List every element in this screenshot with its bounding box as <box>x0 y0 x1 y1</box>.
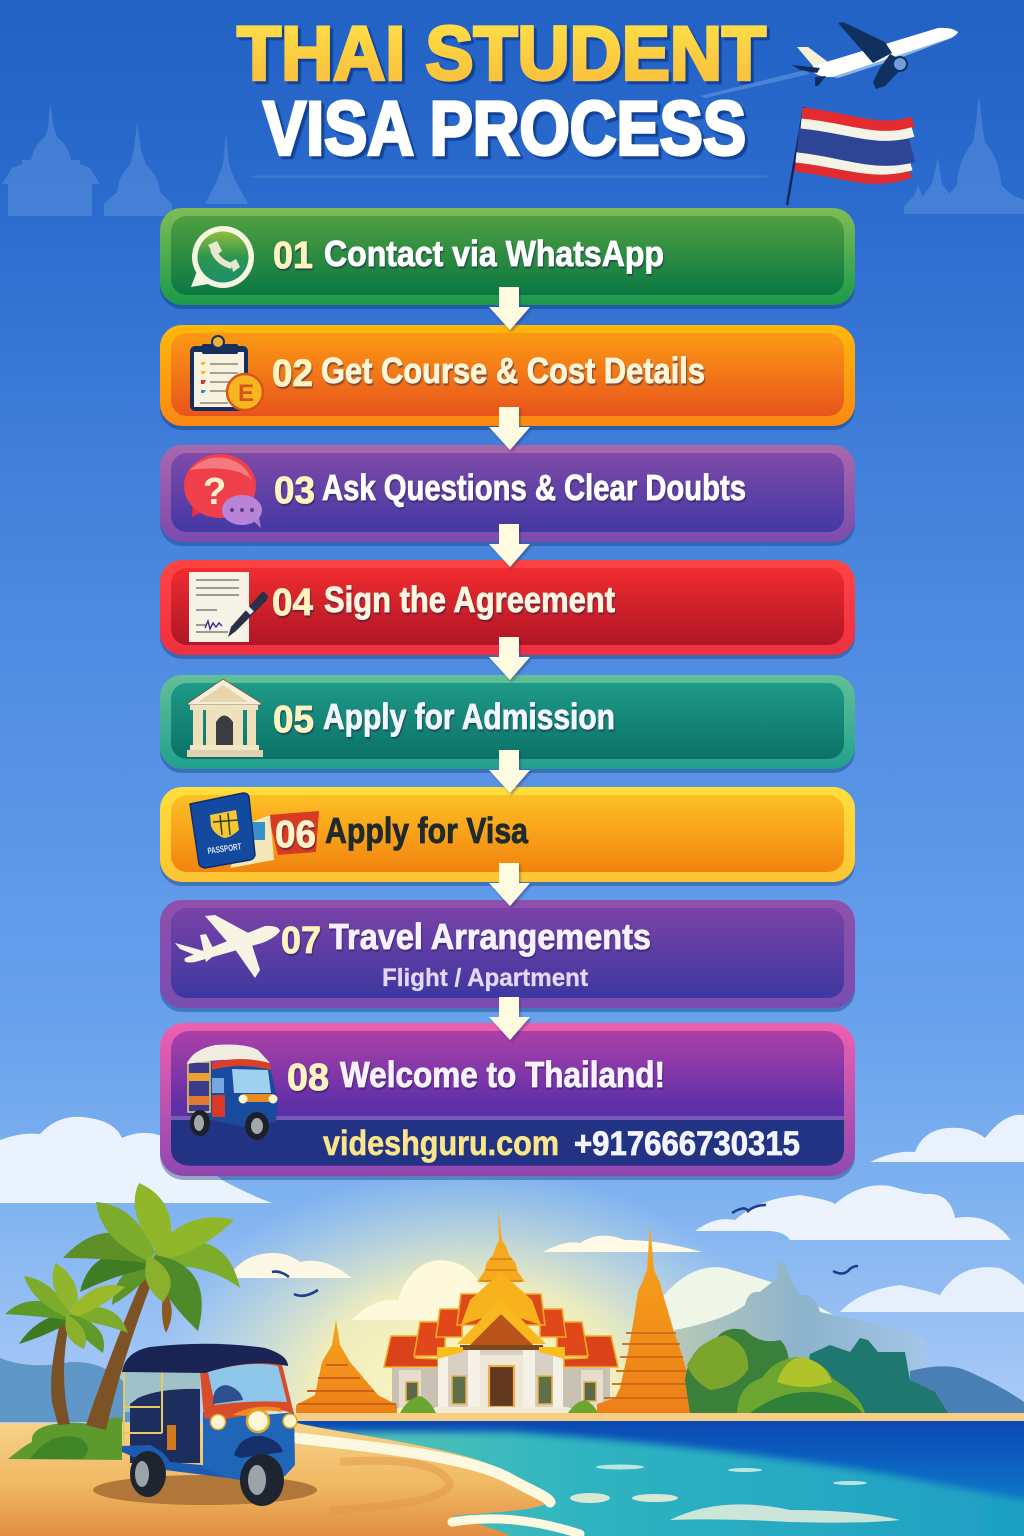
wheels <box>190 1110 210 1136</box>
icon: white plane <box>175 915 280 978</box>
windshield <box>208 1364 287 1405</box>
upper gold chevron <box>461 1272 541 1325</box>
step 1 label: Contact via WhatsApp <box>324 233 664 274</box>
big palm trunk <box>86 1270 152 1430</box>
tuk-tuk large <box>93 1344 317 1506</box>
step 3 number: 03 <box>274 470 315 512</box>
sea shallows <box>290 1432 1024 1536</box>
rear panel <box>188 1062 210 1112</box>
side window <box>212 1078 224 1093</box>
icon: chat bubbles: ? <box>203 471 226 513</box>
red band <box>200 1360 294 1419</box>
mountains <box>0 1260 1024 1422</box>
cab lower body <box>203 1412 295 1480</box>
step 7 panel <box>160 900 855 1012</box>
beach foam <box>297 1438 580 1534</box>
gold skirts <box>437 1347 463 1359</box>
step 8 label: Welcome to Thailand! <box>340 1054 665 1095</box>
step 7 sub label: Flight / Apartment <box>382 964 589 992</box>
bushes <box>400 1396 436 1413</box>
small palm trunk <box>51 1315 70 1425</box>
cloud: right top <box>870 1115 1024 1162</box>
arrow 3 <box>489 524 530 567</box>
step 8 number: 08 <box>287 1057 329 1099</box>
seats <box>130 1389 200 1463</box>
ground shadow <box>93 1475 317 1505</box>
step 4 label: Sign the Agreement <box>324 579 615 620</box>
phone number: +917666730315 <box>574 1125 800 1163</box>
icon: signed document <box>189 572 268 642</box>
windshield <box>232 1069 271 1093</box>
lime crown <box>687 1335 748 1390</box>
second red roofs <box>414 1322 445 1356</box>
step 8 panel <box>160 1023 855 1180</box>
spire <box>477 1208 525 1282</box>
step 2 label: Get Course & Cost Details <box>321 350 705 391</box>
title line 1: THAI STUDENT <box>237 12 766 96</box>
gable beam <box>460 1345 543 1350</box>
step 7 label: Travel Arrangements <box>329 916 651 957</box>
step 6 label: Apply for Visa <box>325 810 529 851</box>
step 1 number: 01 <box>273 235 313 277</box>
fourth red roofs <box>457 1294 482 1325</box>
icon: chat bubbles <box>184 454 262 528</box>
gable gold <box>457 1299 546 1344</box>
front wheel <box>240 1454 284 1506</box>
rear frame rails <box>124 1372 162 1447</box>
step 5 label: Apply for Admission <box>323 696 615 737</box>
green tree <box>685 1329 789 1413</box>
rear glass <box>124 1372 200 1412</box>
step 2 number: 02 <box>272 353 313 395</box>
lights <box>247 1410 269 1432</box>
dead frond <box>162 1290 172 1333</box>
icon: airplane <box>700 22 958 98</box>
rear skirt <box>122 1445 232 1478</box>
right stupa <box>597 1225 715 1413</box>
icon: passport and tickets <box>190 793 319 868</box>
temple silhouettes right <box>904 95 1024 214</box>
arrow 1 <box>489 287 530 330</box>
arrow 4 <box>489 637 530 680</box>
arrow 5 <box>489 750 530 793</box>
step 1 panel <box>160 208 855 309</box>
rear wheel <box>130 1451 166 1497</box>
icon: clipboard: E <box>238 380 254 407</box>
step 6 panel <box>160 787 855 886</box>
plinth <box>435 1407 569 1413</box>
sea highlights <box>570 1464 900 1523</box>
outer red roofs <box>384 1336 438 1367</box>
teal trees <box>800 1338 948 1413</box>
icon: university building <box>187 679 263 757</box>
trees <box>685 1329 948 1413</box>
contact band <box>171 1120 844 1165</box>
cloud: right middle <box>695 1185 1011 1240</box>
scene: distant sky glow <box>0 1170 1024 1430</box>
roof <box>187 1045 270 1064</box>
title <box>237 12 766 172</box>
step 2 panel <box>160 325 855 430</box>
rust column <box>167 1425 176 1450</box>
door <box>489 1366 514 1407</box>
beach sand <box>0 1423 549 1536</box>
windows <box>406 1382 418 1401</box>
step 4 number: 04 <box>272 582 313 624</box>
cloud: left <box>0 1117 272 1203</box>
icon: passport and tickets: PASSPORT <box>207 841 242 856</box>
step 3 panel <box>160 445 855 546</box>
temple silhouettes left <box>2 102 248 216</box>
red door <box>212 1095 225 1117</box>
main wall <box>438 1350 563 1408</box>
third red roofs <box>436 1309 462 1337</box>
cloud: temple background <box>228 1236 1024 1330</box>
step 5 number: 05 <box>273 699 314 741</box>
front fender <box>234 1436 283 1458</box>
title line 2: VISA PROCESS <box>263 86 746 172</box>
birds <box>272 1205 858 1296</box>
temple complex <box>384 1208 618 1413</box>
big fronds <box>63 1183 240 1331</box>
icon: clipboard <box>190 336 263 411</box>
left stupa <box>296 1320 397 1414</box>
temple side walls <box>392 1368 610 1408</box>
icon: small tuk-tuk <box>187 1045 278 1140</box>
body <box>188 1062 278 1128</box>
driver silhouette <box>213 1385 243 1404</box>
step 5 panel <box>160 675 855 773</box>
sand strip <box>290 1413 1024 1421</box>
small fronds <box>5 1263 128 1353</box>
arrow 7 <box>489 997 530 1040</box>
arrow 6 <box>489 863 530 906</box>
orange accent <box>232 1407 282 1416</box>
step 4 panel <box>160 560 855 659</box>
step 3 label: Ask Questions & Clear Doubts <box>322 467 746 508</box>
roof <box>122 1344 288 1373</box>
step 7 number: 07 <box>281 920 321 962</box>
bush <box>8 1417 122 1460</box>
title underline <box>252 176 767 178</box>
step 6 number: 06 <box>275 814 316 856</box>
red strip <box>212 1059 271 1070</box>
website: videshguru.com <box>323 1124 559 1163</box>
lights <box>243 1094 273 1102</box>
palm trees <box>5 1183 240 1430</box>
sand swirl <box>330 1461 450 1510</box>
icon: WhatsApp <box>191 226 254 288</box>
front bush <box>737 1357 865 1413</box>
icon: Thai flag <box>787 107 913 205</box>
sea <box>290 1421 1024 1536</box>
gable face <box>470 1314 533 1345</box>
arrow 2 <box>489 407 530 450</box>
